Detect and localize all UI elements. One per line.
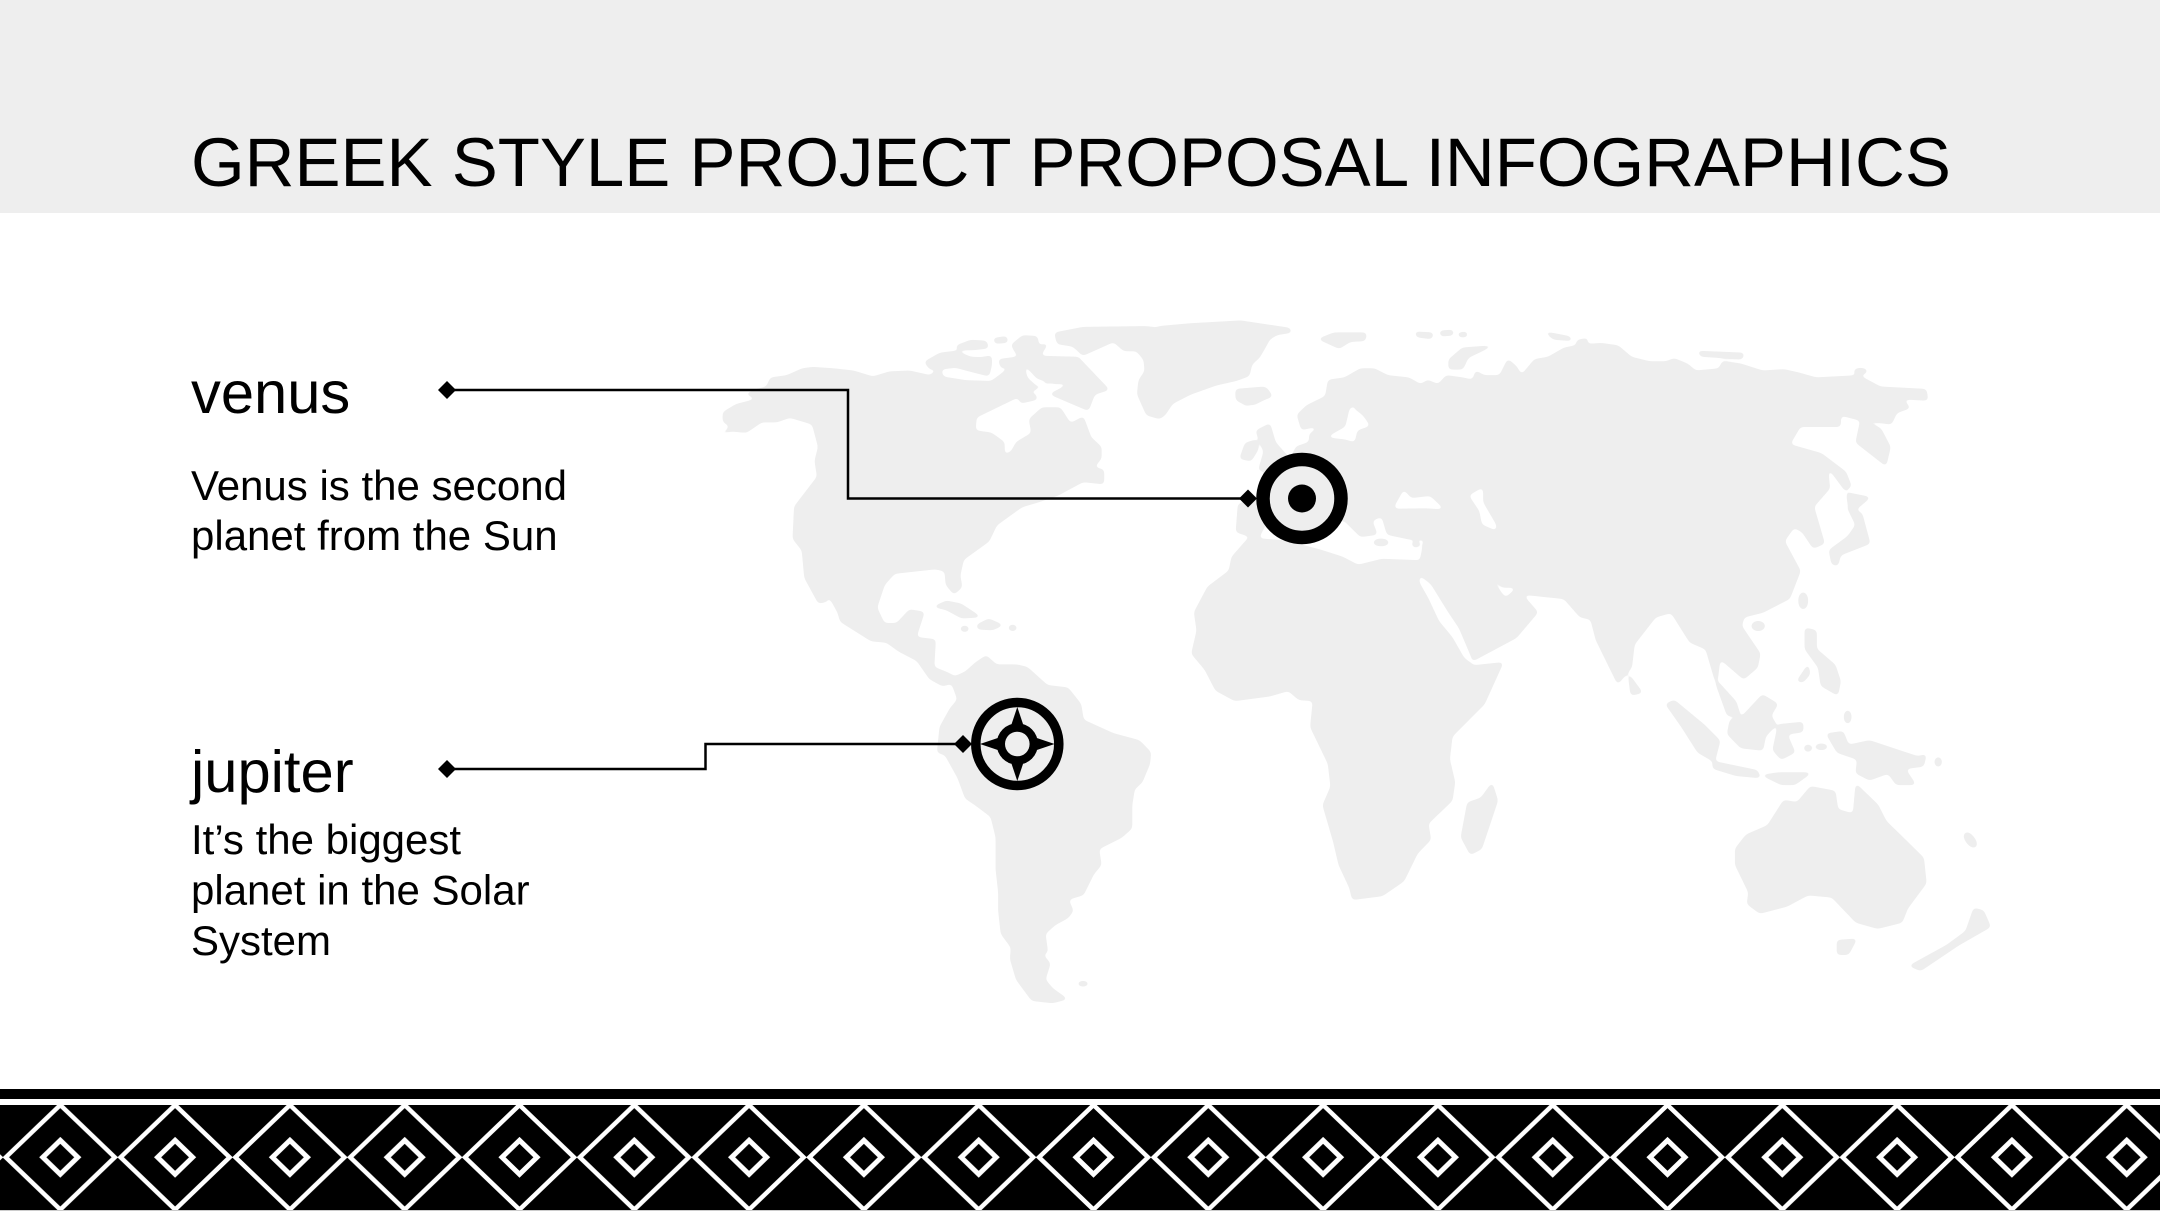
map: americas and greenland <box>716 321 1291 1003</box>
header band <box>0 0 2160 213</box>
heading: venus: venus <box>191 359 350 426</box>
connector: jupiter <box>438 735 972 778</box>
text block: jupiter description: planet in the Solar <box>191 866 530 914</box>
text block: venus description: planet from the Sun <box>191 512 558 559</box>
text block: jupiter description <box>191 816 530 964</box>
footer greek diamond pattern <box>0 1105 2160 1211</box>
text block: jupiter description: System <box>191 917 331 964</box>
title: GREEK STYLE PROJECT PROPOSAL INFOGRAPHICS <box>191 124 1951 201</box>
world map <box>716 321 1990 1003</box>
text block: venus description <box>191 462 567 559</box>
footer bar <box>0 1089 2160 1099</box>
text block: venus description: Venus is the second <box>191 462 567 509</box>
icon: target <box>1263 460 1341 538</box>
heading: jupiter: jupiter <box>189 738 354 805</box>
connector: venus <box>438 381 1257 508</box>
text block: jupiter description: It’s the biggest <box>191 816 461 863</box>
map: eurasia, africa and oceania <box>1192 330 1990 970</box>
icon: compass <box>976 702 1059 786</box>
